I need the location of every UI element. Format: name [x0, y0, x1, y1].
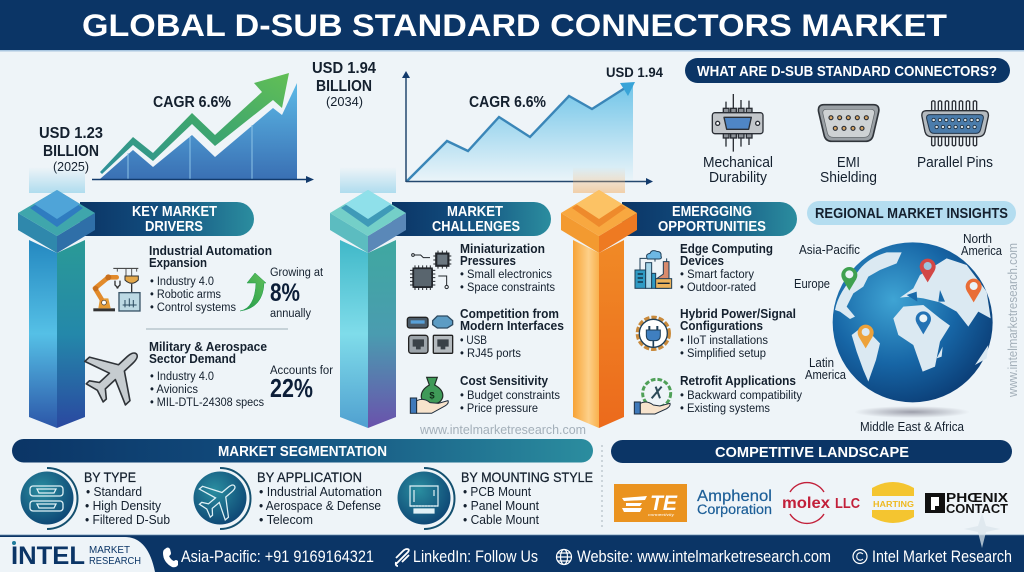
heading pill: EMERGGING	[672, 204, 752, 220]
text: edge computing: Edge Computing	[680, 241, 773, 256]
icon: hand holding gear	[634, 379, 671, 414]
start value label: BILLION	[43, 143, 99, 160]
text: military and aerospace: Military & Aerospace	[149, 339, 267, 354]
icon: smart factory with cloud	[635, 251, 672, 288]
text: competition from modern interfaces	[460, 306, 564, 360]
icon: by type connectors	[20, 468, 78, 529]
text: by application: BY APPLICATION	[257, 469, 362, 485]
panel: emerging opportunities	[561, 167, 802, 428]
label: EMI shielding	[820, 155, 877, 186]
logo: TE connectivity	[614, 484, 687, 522]
watermark: website: www.intelmarketresearch.com	[419, 423, 586, 437]
text: retrofit applications	[680, 373, 802, 415]
text: by mounting style: • PCB Mount	[463, 485, 531, 499]
text: hybrid power signal: Configurations	[680, 318, 763, 333]
contact: phone: Asia-Pacific: +91 9169164321	[181, 548, 374, 566]
region labels: Asia-Pacific	[799, 243, 860, 257]
pin: orange red	[966, 279, 982, 302]
stat: growing 8 percent: Growing at	[270, 267, 324, 279]
text: cost sensitivity: Cost Sensitivity	[460, 373, 549, 388]
text: military and aerospace	[149, 339, 267, 409]
panel: competitive landscape	[611, 440, 1012, 523]
logo: Phoenix Contact	[925, 490, 1008, 516]
text: competition from modern interfaces: • RJ45 ports	[460, 348, 521, 360]
text: by type: • Standard	[86, 485, 142, 499]
end value label: USD 1.94	[606, 64, 663, 80]
region labels: America	[961, 244, 1002, 258]
text: by type: • Filtered D-Sub	[85, 513, 170, 527]
logo: Intel Market Research: MARKET	[89, 545, 130, 556]
icon: parallel pins connector	[922, 101, 988, 146]
label: EMI shielding: Shielding	[820, 170, 877, 186]
region labels: North	[963, 232, 992, 246]
heading pill: MARKET SEGMENTATION	[218, 443, 387, 460]
panel: market segmentation	[12, 439, 593, 529]
text: retrofit applications: • Existing systems	[680, 403, 770, 415]
heading pill	[12, 439, 593, 462]
text: edge computing: • Smart factory	[680, 269, 754, 281]
icon: by application plane	[192, 468, 250, 529]
icon: green growth arrow	[240, 273, 266, 311]
logo: Amphenol	[697, 488, 772, 517]
text: military and aerospace: • Avionics	[150, 384, 198, 396]
text: by application: • Industrial Automation	[259, 485, 382, 499]
logo: molex: molex	[782, 495, 830, 512]
chart: line chart with axes	[402, 64, 663, 185]
text: miniaturization pressures: Pressures	[460, 253, 516, 268]
text: by application: • Telecom	[259, 513, 313, 527]
text: hybrid power signal: • Simplified setup	[680, 348, 766, 360]
icon: EMI shielding connector	[818, 105, 879, 141]
text: hybrid power signal	[680, 306, 796, 360]
text: industrial automation: • Control systems	[150, 302, 236, 314]
logo: Amphenol: Amphenol	[697, 488, 772, 505]
pin: blue	[916, 311, 931, 334]
heading pill: OPPORTUNITIES	[658, 219, 766, 235]
logo: TE connectivity: TE	[650, 492, 678, 515]
heading pill	[622, 202, 797, 236]
icon: mechanical durability connector	[712, 94, 763, 152]
text: retrofit applications: • Backward compatibility	[680, 390, 802, 402]
text: miniaturization pressures: Miniaturization	[460, 241, 545, 256]
text: competition from modern interfaces: Competition from	[460, 306, 559, 321]
icon: globe	[556, 550, 572, 564]
label: mechanical durability: Mechanical	[703, 155, 773, 171]
stat: growing 8 percent	[270, 267, 324, 320]
text: by mounting style	[461, 469, 593, 527]
pin: red	[920, 259, 936, 282]
heading pill	[807, 201, 1016, 225]
end value label: USD 1.94	[312, 60, 376, 77]
chart: market growth area with green arrow	[39, 60, 376, 183]
icon: money bag over hand	[410, 377, 448, 413]
panel: market challenges	[330, 167, 564, 428]
start value label: (2025)	[53, 159, 89, 174]
text: by type	[84, 469, 170, 527]
start value label: USD 1.23	[39, 125, 103, 142]
region labels: America	[805, 368, 846, 382]
logo: Intel Market Research	[0, 537, 155, 572]
heading pill	[80, 202, 254, 236]
text: industrial automation: • Industry 4.0	[150, 276, 214, 288]
stat: accounts for 22 percent	[270, 365, 333, 403]
text: miniaturization pressures	[460, 241, 555, 294]
sparkle decoration	[964, 513, 1000, 548]
contact: website: Website: www.intelmarketresearch.com	[577, 548, 831, 566]
logo: Intel Market Research: INTEL	[11, 542, 85, 570]
icon: aeroplane	[74, 332, 157, 415]
stat: accounts for 22 percent: 22%	[270, 373, 313, 403]
text: military and aerospace: • MIL-DTL-24308 specs	[150, 397, 264, 409]
logo: Harting	[872, 482, 914, 523]
contact: linkedin: LinkedIn: Follow Us	[413, 548, 538, 566]
globe map	[833, 242, 993, 402]
icon: by mounting style board	[398, 468, 454, 529]
icon: link	[396, 549, 409, 566]
region labels: Latin	[809, 356, 834, 370]
logo: Amphenol: Corporation	[697, 502, 772, 517]
logo: Harting: HARTING	[873, 500, 914, 509]
logo: Intel Market Research: RESEARCH	[89, 556, 141, 567]
logo: molex	[782, 483, 860, 523]
label: mechanical durability: Durability	[709, 170, 768, 186]
stat: accounts for 22 percent: Accounts for	[270, 365, 333, 377]
stat: growing 8 percent: 8%	[270, 279, 300, 307]
heading pill: COMPETITIVE LANDSCAPE	[715, 444, 909, 461]
logo: molex: LLC	[835, 496, 860, 512]
icon: phone	[163, 548, 178, 567]
pin: amber	[858, 325, 874, 348]
heading pill: MARKET	[447, 204, 503, 220]
text: cost sensitivity	[460, 373, 560, 415]
text: edge computing: Devices	[680, 253, 724, 268]
panel: what are D-Sub connectors	[685, 58, 1010, 186]
text: miniaturization pressures: • Space constraints	[460, 282, 555, 294]
icon: modern interface ports	[407, 316, 453, 353]
heading pill: KEY MARKET	[132, 204, 217, 220]
text: by mounting style: BY MOUNTING STYLE	[461, 469, 593, 485]
pillar: orange	[561, 167, 637, 428]
label: mechanical durability	[703, 155, 773, 186]
heading pill: DRIVERS	[145, 219, 203, 235]
text: industrial automation: Expansion	[149, 255, 207, 270]
title banner: GLOBAL D-SUB STANDARD CONNECTORS MARKET	[82, 7, 947, 43]
label: EMI shielding: EMI	[837, 155, 860, 171]
end value label: BILLION	[316, 78, 372, 95]
text: by type: • High Density	[85, 499, 162, 513]
logo: Phoenix Contact: CONTACT	[946, 501, 1008, 516]
text: cost sensitivity: • Price pressure	[460, 403, 538, 415]
logo: Phoenix Contact: PHŒNIX	[946, 490, 1008, 505]
heading pill	[685, 58, 1010, 83]
pillar: teal	[330, 167, 406, 428]
heading pill	[392, 202, 551, 236]
start value label	[39, 125, 103, 174]
icon: money bag over hand: $	[429, 391, 435, 401]
heading pill: CHALLENGES	[432, 219, 520, 235]
text: by application	[257, 469, 382, 527]
end value label: (2034)	[326, 94, 363, 109]
globe shadow	[854, 406, 970, 418]
text: hybrid power signal: Hybrid Power/Signal	[680, 306, 796, 321]
label: parallel pins: Parallel Pins	[917, 155, 993, 171]
text: competition from modern interfaces: • USB	[460, 335, 487, 347]
text: hybrid power signal: • IIoT installations	[680, 335, 768, 347]
text: competition from modern interfaces: Modern Interfaces	[460, 318, 564, 333]
logo: TE connectivity: connectivity	[648, 512, 675, 517]
text: edge computing	[680, 241, 773, 294]
region labels: Middle East & Africa	[860, 420, 964, 434]
text: industrial automation: • Robotic arms	[150, 289, 221, 301]
region labels: Europe	[794, 277, 830, 291]
icon: robotic arm and control panel	[93, 268, 140, 311]
text: industrial automation	[149, 243, 272, 314]
panel: regional market insights	[794, 201, 1020, 434]
title banner	[0, 0, 1024, 52]
icon: microchips	[410, 251, 451, 290]
stat: growing 8 percent: annually	[270, 308, 311, 320]
CAGR label: CAGR 6.6%	[153, 94, 231, 111]
text: industrial automation: Industrial Automation	[149, 243, 272, 258]
text: miniaturization pressures: • Small electronics	[460, 269, 552, 281]
panel: key market drivers	[18, 167, 333, 428]
CAGR label: CAGR 6.6%	[469, 94, 546, 111]
watermark: vertical website: www.intelmarketresearch.com	[1006, 243, 1020, 398]
text: by application: • Aerospace & Defense	[259, 499, 381, 513]
region labels	[794, 232, 1002, 434]
icon: gear with plug	[637, 317, 669, 349]
text: retrofit applications: Retrofit Applications	[680, 373, 796, 388]
end value label	[312, 60, 376, 109]
text: military and aerospace: • Industry 4.0	[150, 371, 214, 383]
text: by type: BY TYPE	[84, 469, 136, 485]
text: edge computing: • Outdoor-rated	[680, 282, 756, 294]
pin: green	[841, 267, 857, 291]
text: cost sensitivity: • Budget constraints	[460, 390, 560, 402]
text: by mounting style: • Panel Mount	[463, 499, 540, 513]
pillar: blue	[18, 167, 95, 428]
heading pill	[611, 440, 1012, 463]
text: by mounting style: • Cable Mount	[463, 513, 539, 527]
text: military and aerospace: Sector Demand	[149, 351, 236, 366]
footer bar	[0, 513, 1024, 572]
